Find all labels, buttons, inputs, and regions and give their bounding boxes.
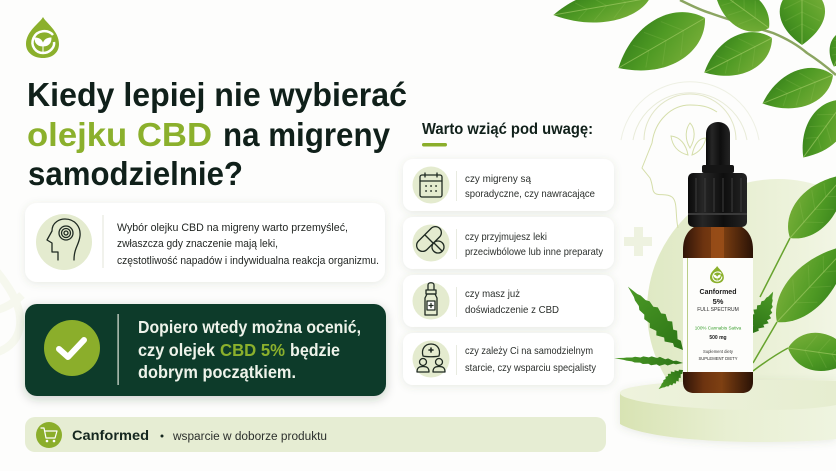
bottle label	[683, 258, 753, 372]
bottle label: FULL SPECTRUM	[697, 307, 739, 313]
conclusion text	[138, 317, 361, 382]
conclusion text: dobrym początkiem.	[138, 362, 296, 382]
panel: intro card	[25, 203, 385, 282]
bar tagline: wsparcie w doborze produktu	[172, 431, 327, 443]
conclusion text: Dopiero wtedy można ocenić,	[138, 317, 361, 337]
right column heading	[422, 121, 593, 146]
card text	[465, 345, 597, 374]
card text: czy zależy Ci na samodzielnym	[465, 345, 593, 357]
title: olejku CBD	[27, 117, 212, 154]
panel: dark conclusion card	[25, 304, 386, 396]
decorative pale logo at left	[0, 252, 22, 355]
title: na migreny	[223, 117, 390, 154]
conclusion text: CBD 5%	[220, 340, 285, 360]
card: migraine frequency	[403, 159, 614, 211]
branch with leaves right of bottle	[753, 162, 836, 376]
intro text	[117, 222, 379, 267]
title: Kiedy lepiej nie wybierać	[27, 77, 407, 114]
podium	[620, 380, 836, 442]
brand logo	[26, 17, 59, 58]
card text: doświadczenie z CBD	[465, 304, 559, 316]
card text: czy migreny są	[465, 173, 531, 185]
card text: przeciwbólowe lub inne preparaty	[465, 246, 604, 258]
background circle	[647, 179, 836, 441]
card: CBD experience	[403, 275, 614, 327]
icon: people and specialist	[417, 344, 445, 372]
right column heading: Warto wziąć pod uwagę:	[422, 121, 593, 138]
conclusion text: będzie	[290, 340, 340, 360]
icon: check mark	[44, 320, 100, 376]
card text	[465, 288, 559, 316]
bottle label: 5%	[713, 297, 724, 306]
head line illustration	[621, 82, 759, 228]
product bottle	[683, 122, 753, 393]
bottle label: Suplement diety	[703, 349, 734, 354]
branch with leaves top right	[551, 0, 836, 168]
bottle label: Canformed	[700, 289, 736, 296]
icon: head with target	[36, 214, 92, 270]
panel: brand bar	[25, 417, 606, 452]
card: medications	[403, 217, 614, 269]
intro text: częstotliwość napadów i indywidualna reakcja organizmu.	[117, 255, 379, 267]
icon: shopping cart	[36, 422, 62, 448]
brand name: Canformed	[72, 427, 149, 443]
title: samodzielnie?	[28, 156, 243, 193]
conclusion text: czy olejek	[138, 340, 215, 360]
card text: czy przyjmujesz leki	[465, 231, 547, 243]
card text	[465, 231, 604, 258]
icon: pills	[414, 224, 444, 254]
plus sign	[624, 227, 652, 256]
title	[27, 77, 407, 193]
bottle label: 100% Cannabis Sativa	[695, 326, 742, 330]
card text	[465, 173, 595, 200]
intro text: zwłaszcza gdy znaczenie mają leki,	[117, 238, 278, 250]
cannabis leaves	[614, 280, 782, 394]
bottle label: SUPLEMENT DIETY	[698, 356, 738, 361]
intro text: Wybór olejku CBD na migreny warto przemyśleć,	[117, 222, 348, 234]
card: independent start or specialist	[403, 333, 614, 385]
icon: calendar	[420, 173, 442, 197]
icon: dropper bottle	[425, 283, 437, 315]
card text: starcie, czy wsparciu specjalisty	[465, 362, 597, 374]
bottle label: 500 mg	[709, 335, 727, 341]
card text: sporadyczne, czy nawracające	[465, 188, 595, 200]
card text: czy masz już	[465, 288, 520, 300]
